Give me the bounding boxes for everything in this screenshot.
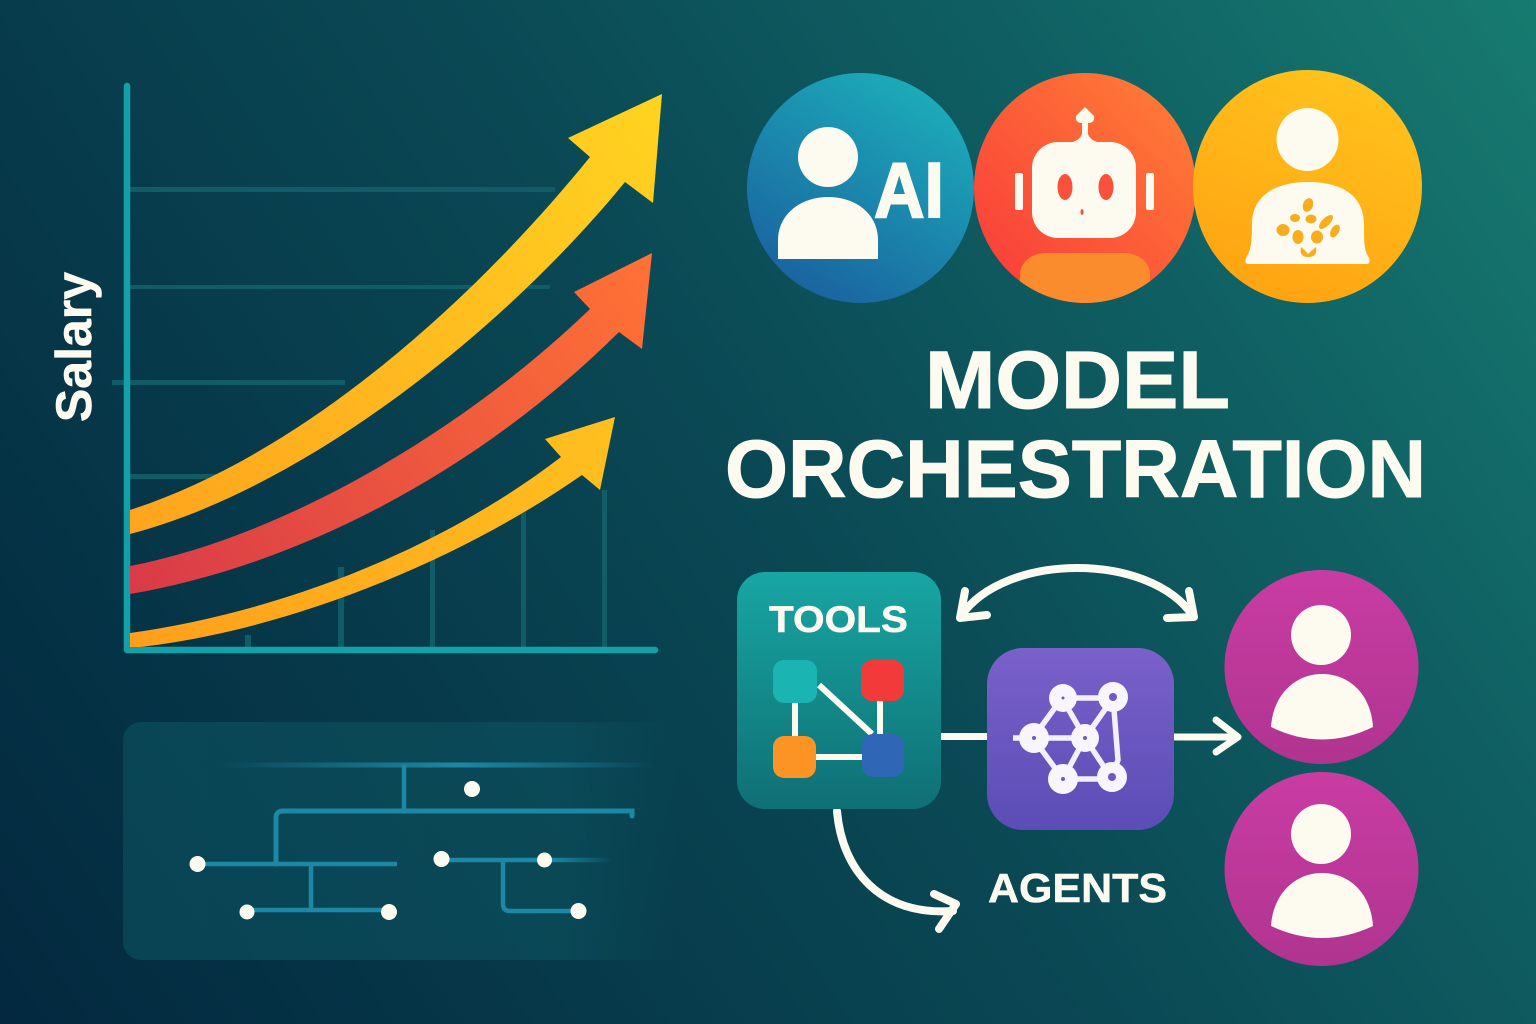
- AI label: AI: [874, 146, 944, 234]
- circle background: [1224, 772, 1418, 966]
- icon: agent two: [1224, 772, 1418, 966]
- chart grid lines: [112, 187, 607, 650]
- icon: person with seeds: [1193, 70, 1422, 303]
- tool nodes: [773, 660, 817, 703]
- chart axes: [127, 86, 655, 650]
- connector: tools to network: [941, 733, 987, 740]
- network background: [987, 648, 1174, 830]
- icon: agent one: [1224, 570, 1418, 764]
- panel: network: [987, 648, 1174, 830]
- network edges: [1013, 697, 1118, 779]
- connector nodes: [190, 781, 586, 920]
- salary growth chart: [46, 86, 662, 650]
- circle background: [747, 73, 974, 303]
- agents label: AGENTS: [988, 865, 1167, 911]
- middle red growth arrow: [130, 253, 652, 594]
- title: [725, 335, 1426, 515]
- title line one: MODEL: [925, 335, 1230, 426]
- lower orange growth arrow: [130, 417, 615, 647]
- arrow: network to agents: [1174, 720, 1238, 752]
- person body: [1245, 182, 1370, 264]
- circle background: [1224, 570, 1418, 764]
- agent body: [1271, 674, 1373, 740]
- circle background: [974, 73, 1196, 303]
- person head: [798, 127, 858, 187]
- panel background: [123, 722, 680, 960]
- orange tool node: [773, 736, 816, 778]
- robot ears: [1015, 173, 1154, 210]
- arrow: tools to agents curve: [837, 811, 956, 929]
- tools background: [737, 572, 941, 809]
- agent head: [1291, 605, 1351, 665]
- agent body: [1271, 873, 1373, 938]
- person head: [1276, 108, 1338, 171]
- network nodes: [1019, 682, 1128, 794]
- panel: tools: [737, 572, 941, 809]
- agent head: [1291, 804, 1351, 864]
- robot shoulders: [1020, 253, 1150, 303]
- arrow: top double-headed curve: [960, 568, 1194, 618]
- icon: AI person: [747, 73, 974, 303]
- seed pattern: [1276, 197, 1342, 257]
- connector lines: [197, 765, 655, 911]
- tools label: TOOLS: [769, 599, 908, 640]
- circle background: [1193, 70, 1422, 303]
- robot eyes: [1058, 174, 1114, 215]
- red tool node: [861, 660, 904, 701]
- top yellow growth arrow: [130, 94, 662, 534]
- y axis label: Salary: [46, 272, 102, 422]
- blue tool node: [862, 734, 904, 777]
- icon: robot: [974, 73, 1196, 310]
- title line two: ORCHESTRATION: [725, 424, 1426, 515]
- tool connection lines: [795, 685, 880, 757]
- robot antenna: [1068, 107, 1102, 143]
- network node centres: [1032, 693, 1117, 781]
- robot head: [1032, 142, 1136, 238]
- person body: [778, 197, 878, 259]
- panel: circuit flow diagram: [123, 722, 680, 960]
